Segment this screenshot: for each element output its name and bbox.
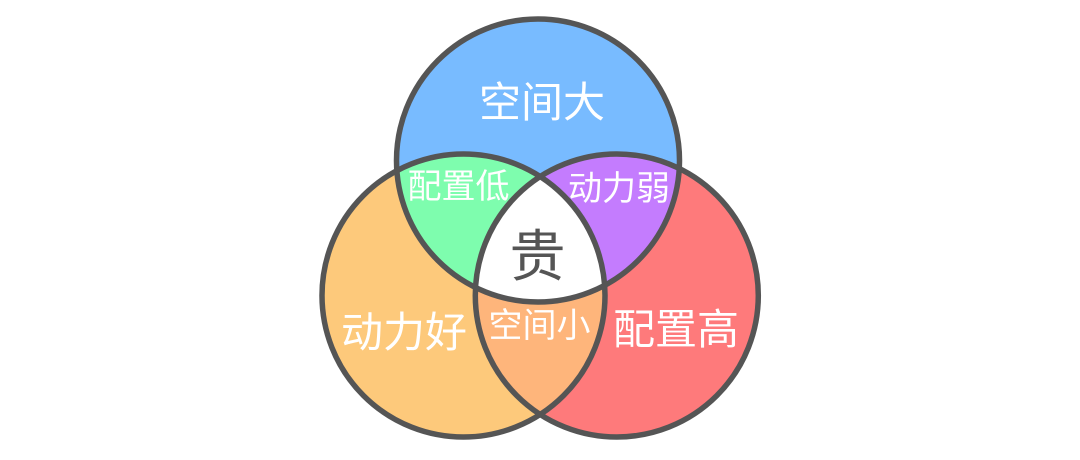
venn diagram (322, 19, 758, 437)
overlap: weak power (purple) (545, 156, 676, 281)
center region: expensive (white) (478, 180, 602, 300)
label: 空间小: 空间小 (488, 307, 590, 345)
label: 动力好: 动力好 (341, 309, 467, 356)
circle fill: power good (orange) (322, 154, 605, 437)
label: 动力弱: 动力弱 (568, 170, 670, 208)
overlap: small space (light orange) (478, 290, 602, 411)
label: 贵: 贵 (510, 225, 566, 288)
label: 配置高: 配置高 (613, 306, 739, 353)
label: 配置低: 配置低 (408, 168, 510, 206)
overlap: low spec (green) (400, 156, 535, 284)
circle fill: high spec (red) (475, 154, 758, 437)
circle outlines (322, 19, 758, 437)
circle fill: space large (blue) (396, 19, 680, 302)
label: 空间大: 空间大 (479, 79, 605, 126)
